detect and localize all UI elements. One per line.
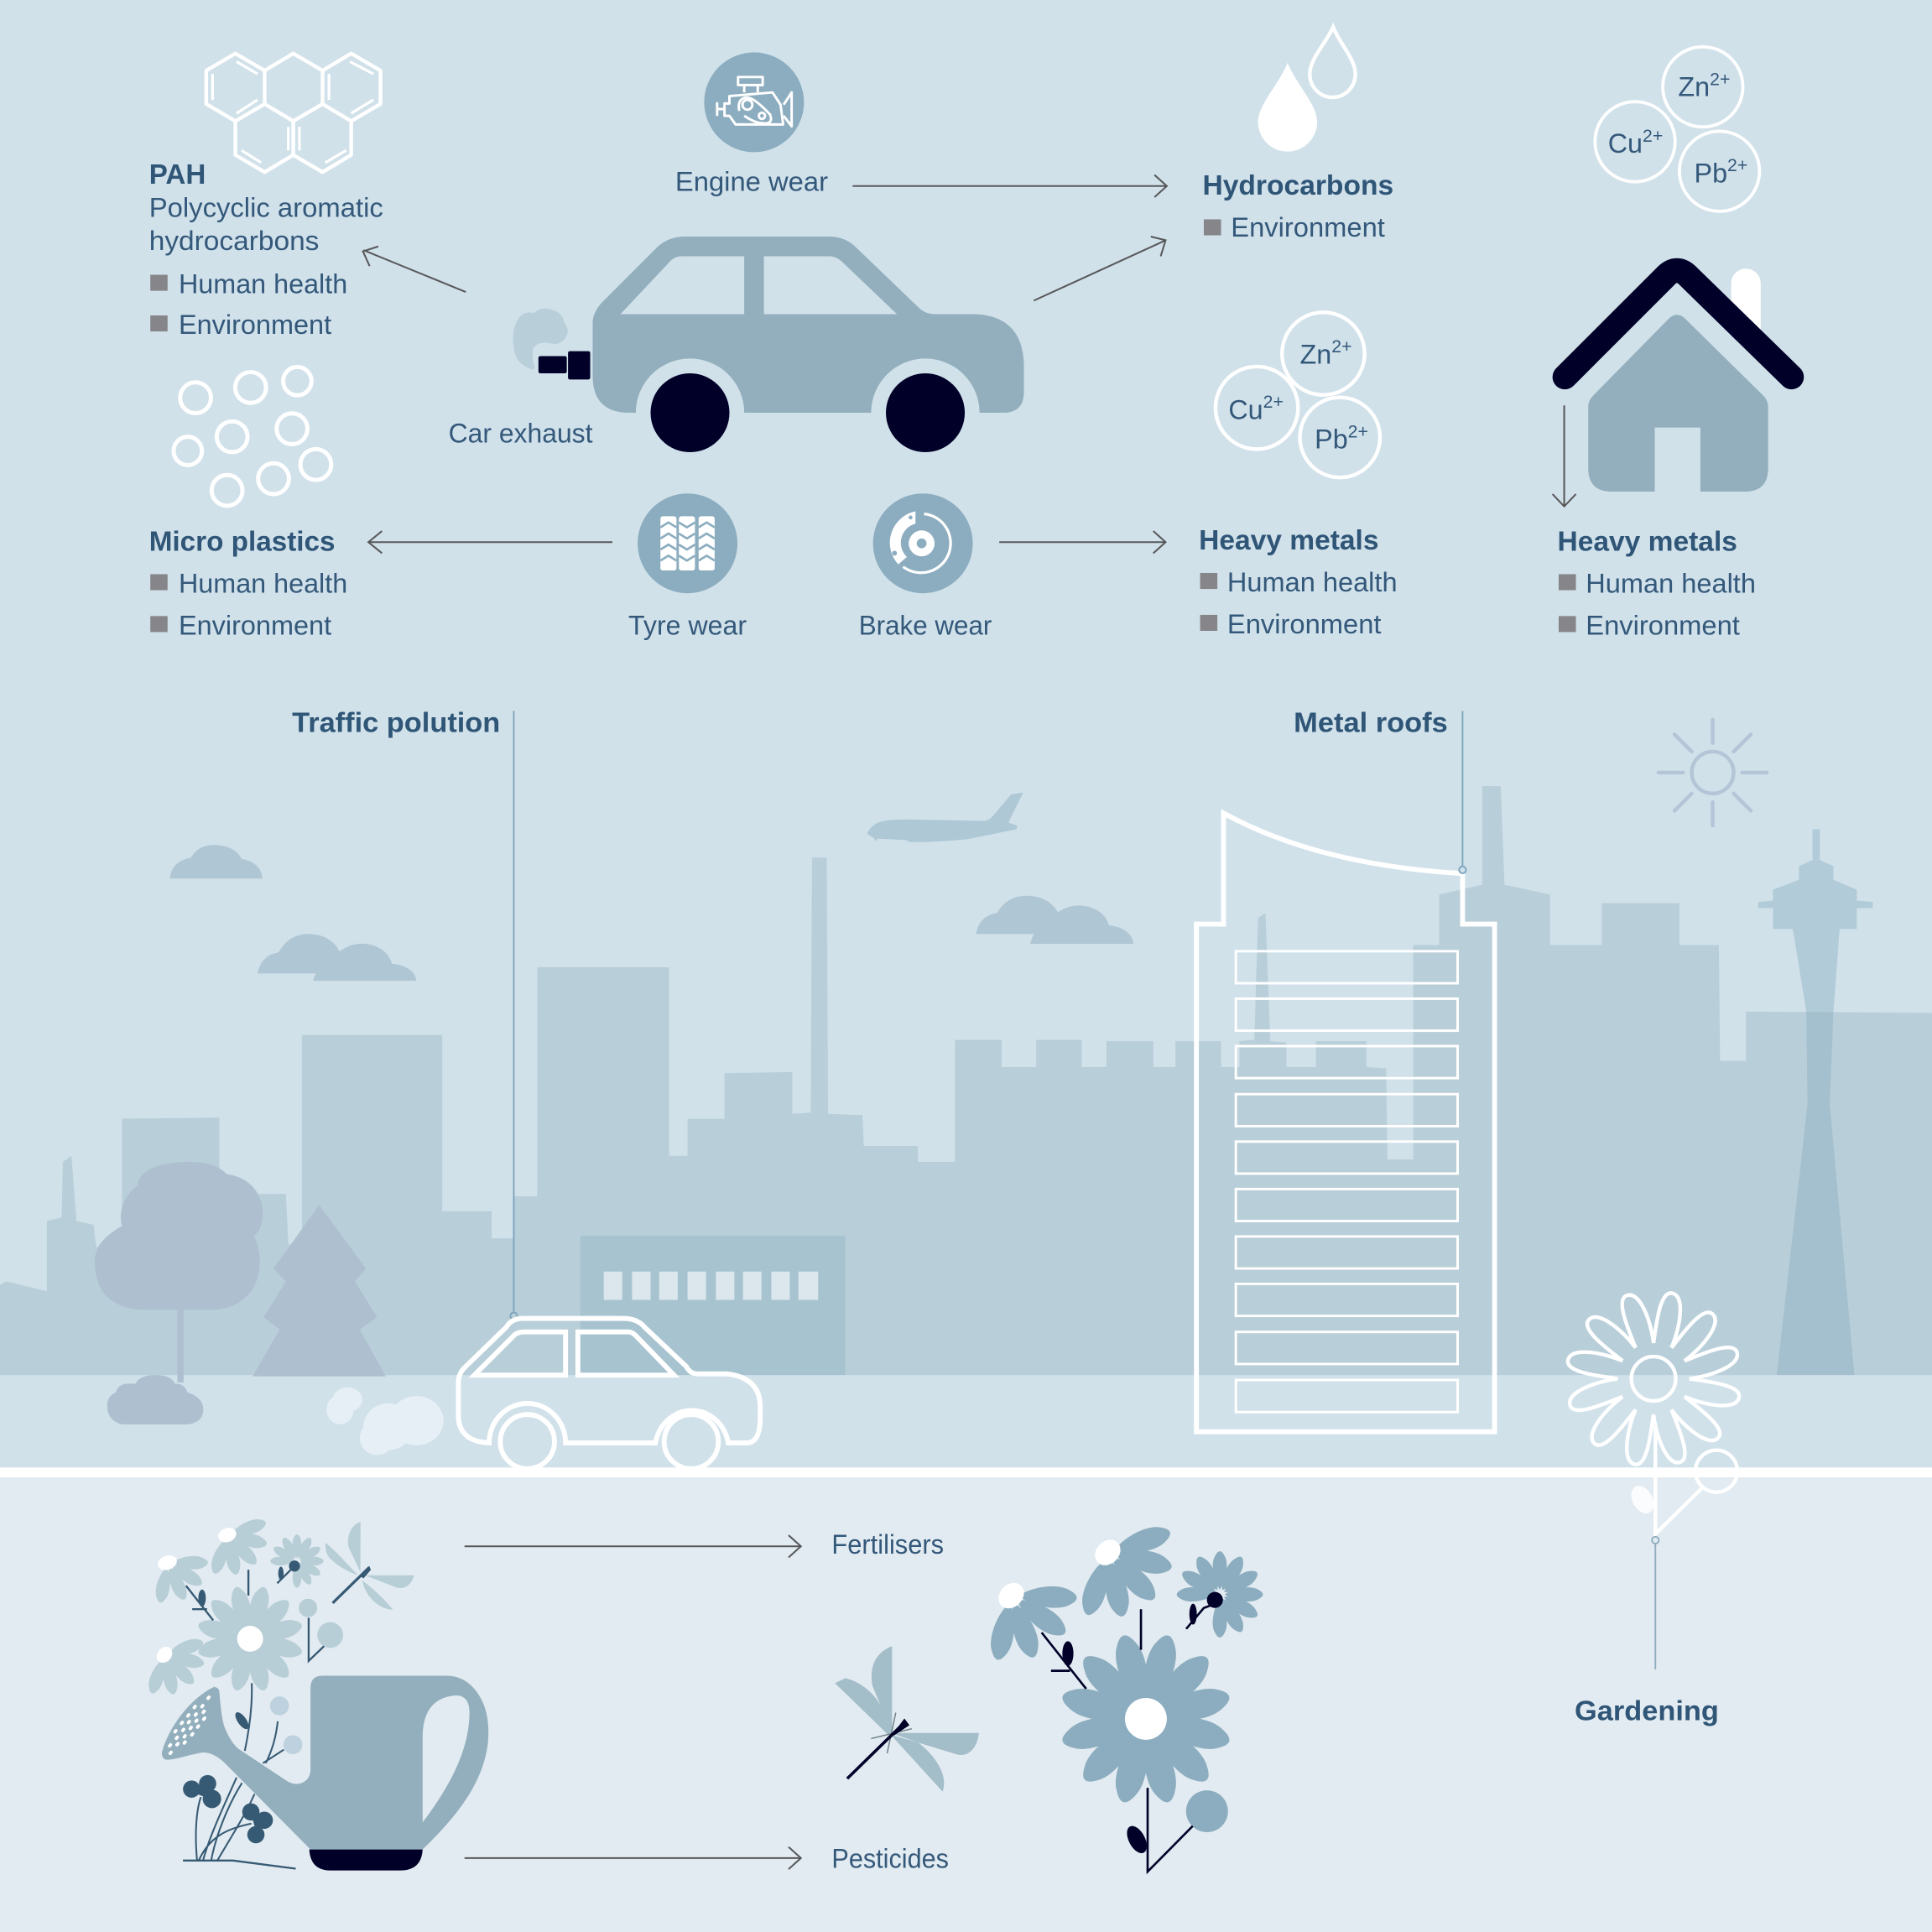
arrow: exhaust to PAH xyxy=(363,247,466,292)
text block: Micro plastics: Micro plastics xyxy=(149,526,335,558)
leader line: roofs xyxy=(1459,711,1466,873)
arrow: house down xyxy=(1553,405,1576,507)
text block: Heavy metals, traffic: Human health xyxy=(1227,567,1398,597)
text block: Micro plastics xyxy=(149,526,347,640)
text block: PAH: hydrocarbons xyxy=(149,226,319,256)
icon: sun xyxy=(1659,720,1767,825)
text block: Heavy metals, traffic: Heavy metals xyxy=(1199,524,1379,556)
text block: Heavy metals, roof xyxy=(1557,526,1756,640)
arrow: car to hydrocarbons xyxy=(1034,237,1165,300)
label: Gardening: Gardening xyxy=(1575,1695,1719,1726)
label: Traffic polution: Traffic polution xyxy=(292,706,500,738)
flower stems and leaves xyxy=(1042,1592,1223,1872)
bouquet stems, small dragonfly and clovers xyxy=(183,1567,369,1869)
label: Fertilisers: Fertilisers xyxy=(831,1529,944,1560)
icon: metal ions, brakes xyxy=(1216,312,1380,477)
icon: airplane xyxy=(867,793,1023,842)
watering can xyxy=(162,1676,488,1871)
clouds xyxy=(170,845,1133,981)
background: lower garden panel xyxy=(0,1477,1932,1932)
blue flowers xyxy=(987,1522,1263,1832)
text block: PAH xyxy=(149,159,383,340)
text block: Heavy metals, roof: Human health xyxy=(1586,568,1756,598)
icon: metal ions, brakes: 2+ xyxy=(1263,392,1284,412)
text block: Heavy metals, traffic xyxy=(1199,524,1398,639)
icon: metal ions, roof xyxy=(1595,47,1759,211)
text block: PAH: Polycyclic aromatic xyxy=(149,192,383,222)
icon: metal ions, brakes: Pb xyxy=(1315,424,1348,455)
text block: PAH: PAH xyxy=(149,159,206,190)
text block: Heavy metals, roof: Environment xyxy=(1586,610,1740,640)
text block: PAH: Human health xyxy=(179,269,347,299)
clovers and leaves xyxy=(183,1560,371,1843)
label: Pesticides: Pesticides xyxy=(831,1844,949,1874)
icon: brake disc xyxy=(873,493,973,593)
icon: metal ions, roof: 2+ xyxy=(1710,69,1730,89)
text block: Heavy metals, traffic: Environment xyxy=(1227,609,1381,639)
text block: Hydrocarbons xyxy=(1202,169,1393,242)
icon: tyre xyxy=(638,493,737,593)
leader line: traffic xyxy=(510,711,518,1320)
icon: metal ions, roof: 2+ xyxy=(1727,155,1747,175)
factory building xyxy=(581,1236,846,1375)
icon: metal ions, roof: Pb xyxy=(1695,158,1727,188)
icon: metal ions, brakes: Zn xyxy=(1300,339,1331,369)
white outline car xyxy=(458,1319,760,1469)
icon: metal ions, brakes: Cu xyxy=(1228,394,1263,424)
text block: Micro plastics: Human health xyxy=(179,568,347,598)
icon: metal ions, roof: Cu xyxy=(1608,128,1643,159)
exhaust smoke xyxy=(326,1388,444,1456)
label: Metal roofs: Metal roofs xyxy=(1294,706,1448,738)
background: upper panel xyxy=(0,0,1932,1467)
icon: micro plastic rings xyxy=(174,367,331,506)
label: Car exhaust: Car exhaust xyxy=(449,418,592,448)
arrow: brake wear to heavy metals xyxy=(999,531,1165,553)
arrow: tyre wear to micro plastics xyxy=(368,531,612,553)
icon: PAH molecule xyxy=(206,54,381,172)
icon: metal ions, brakes: 2+ xyxy=(1331,336,1351,357)
leader line: gardening xyxy=(1652,1537,1659,1669)
arrow: engine wear to hydrocarbons xyxy=(852,175,1167,197)
text block: Micro plastics: Environment xyxy=(179,610,331,640)
arrow: to fertilisers xyxy=(465,1535,801,1557)
icon: metal ions, roof: 2+ xyxy=(1643,126,1663,146)
arrow: to pesticides xyxy=(465,1847,801,1869)
icon: white outline flower xyxy=(1566,1291,1742,1534)
icon: exhaust smoke xyxy=(513,309,568,370)
trees and bush xyxy=(95,1162,386,1424)
dragonfly xyxy=(835,1646,979,1792)
icon: hydrocarbon drops xyxy=(1258,27,1356,152)
label: Engine wear: Engine wear xyxy=(675,167,828,197)
city skyline xyxy=(0,786,1932,1375)
text block: Hydrocarbons: Hydrocarbons xyxy=(1202,169,1393,201)
icon: engine xyxy=(704,52,804,152)
light flower bouquet xyxy=(146,1516,414,1754)
icon: metal ions, brakes: 2+ xyxy=(1348,421,1368,441)
icon: metal ions, roof: Zn xyxy=(1678,72,1710,102)
illustration: main car xyxy=(592,237,1024,452)
text block: Heavy metals, roof: Heavy metals xyxy=(1557,526,1737,558)
white outline building with metal roof xyxy=(1196,813,1495,1432)
white ground divider xyxy=(0,1467,1932,1477)
text block: PAH: Environment xyxy=(179,310,331,340)
text block: Hydrocarbons: Environment xyxy=(1231,212,1385,242)
icon: exhaust pipe xyxy=(539,352,591,379)
observation tower xyxy=(1758,829,1872,1375)
icon: house with metal roof xyxy=(1565,268,1792,492)
label: Brake wear: Brake wear xyxy=(859,610,992,640)
label: Tyre wear: Tyre wear xyxy=(628,610,747,640)
